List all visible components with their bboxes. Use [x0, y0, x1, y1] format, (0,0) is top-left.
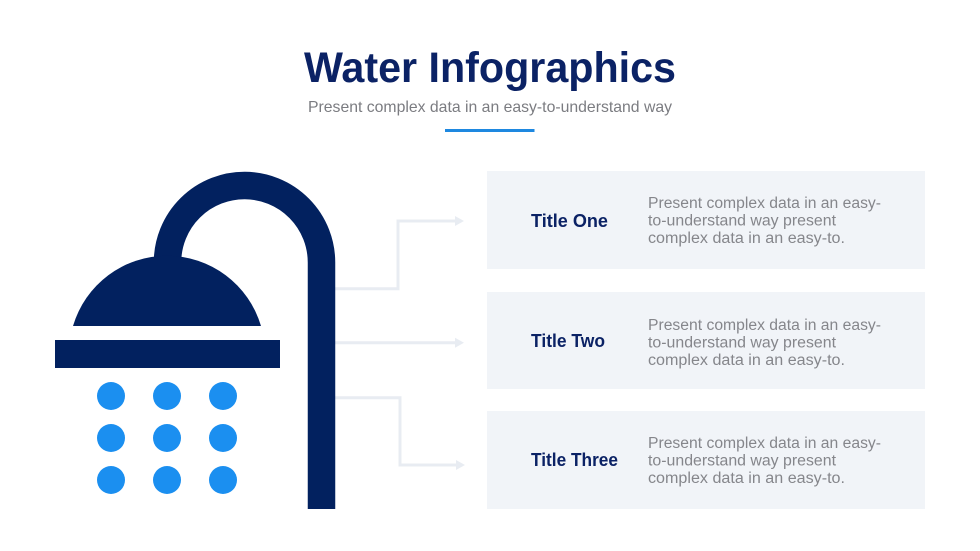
- subtitle: Present complex data in an easy-to-understand way: [308, 99, 672, 116]
- text block: title three: complex data in an easy-to.: [648, 470, 845, 487]
- shower pipe: [168, 185, 322, 509]
- shower head bar: [55, 340, 280, 368]
- arrow: to title one: [334, 216, 464, 289]
- icon: shower: [55, 185, 322, 509]
- text block: title two: complex data in an easy-to.: [648, 352, 845, 369]
- text block: title one: to-understand way present: [648, 212, 837, 230]
- text block: title one: Present complex data in an easy-: [648, 195, 881, 212]
- text block: title two: to-understand way present: [648, 334, 837, 352]
- title underline: [445, 129, 534, 132]
- text block: title three: [648, 435, 881, 487]
- text block: title two: Present complex data in an easy-: [648, 317, 881, 334]
- water drops: [97, 382, 237, 494]
- heading: title two: Title Two: [531, 330, 605, 351]
- panel: title three: [487, 411, 925, 509]
- text block: title two: [648, 317, 881, 369]
- arrow: to title two: [334, 338, 464, 348]
- text block: title one: [648, 195, 881, 247]
- title: Water Infographics: [304, 44, 676, 92]
- heading: title one: Title One: [531, 210, 608, 231]
- panel: title one: [487, 171, 925, 269]
- text block: title three: Present complex data in an easy-: [648, 435, 881, 452]
- heading: title three: Title Three: [531, 449, 618, 470]
- shower head dome: [73, 256, 261, 326]
- text block: title three: to-understand way present: [648, 452, 837, 470]
- arrow: to title three: [334, 398, 465, 470]
- text block: title one: complex data in an easy-to.: [648, 230, 845, 247]
- panel: title two: [487, 292, 925, 389]
